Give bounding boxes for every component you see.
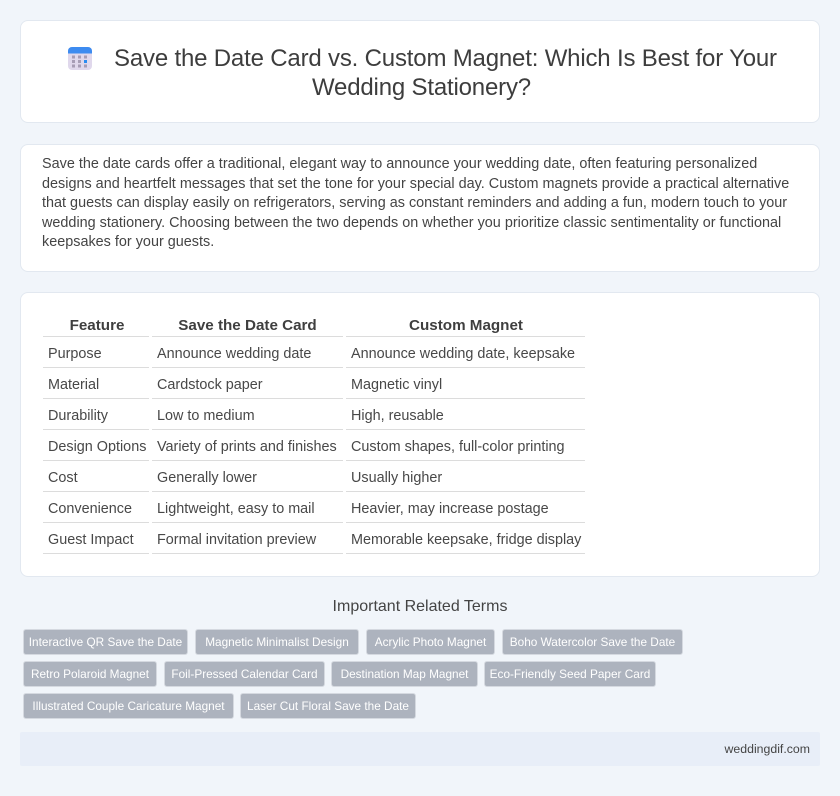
comparison table: Usually higher: [351, 470, 442, 486]
panel: header card: [20, 20, 820, 123]
comparison table: Announce wedding date: [157, 346, 311, 362]
comparison table: Magnetic vinyl: [351, 377, 442, 393]
related term tags: Illustrated Couple Caricature Magnet: [32, 699, 225, 713]
panel: comparison table card: [20, 292, 820, 577]
text block: summary paragraph: wedding stationery. Choosing between the two depends on whether you prioritize classic sentimentality or functional: [42, 214, 781, 230]
comparison table: Save the Date Card: [178, 317, 317, 334]
comparison table: Lightweight, easy to mail: [157, 501, 315, 517]
comparison table: Custom Magnet: [409, 317, 523, 334]
comparison table: Durability: [48, 408, 108, 424]
comparison table: Generally lower: [157, 470, 257, 486]
comparison table: Design Options: [48, 439, 146, 455]
comparison table: [43, 317, 585, 554]
comparison table: Heavier, may increase postage: [351, 501, 549, 517]
heading: related terms: Important Related Terms: [333, 598, 507, 615]
panel: summary card: [20, 144, 820, 272]
related term tags: Retro Polaroid Magnet: [31, 667, 149, 681]
icon: calendar: [68, 47, 92, 70]
footer source text: weddingdif.com: [725, 742, 810, 756]
text block: summary paragraph: designs and heartfelt messages that set the tone for your special day. Custom magnets provide a practical alternative: [42, 176, 789, 192]
related term tags: Acrylic Photo Magnet: [375, 635, 486, 649]
footer bar: [20, 732, 820, 766]
related term tags: Boho Watercolor Save the Date: [510, 635, 675, 649]
comparison table: Memorable keepsake, fridge display: [351, 532, 581, 548]
comparison table: Cost: [48, 470, 78, 486]
comparison table: Guest Impact: [48, 532, 134, 548]
comparison table: Cardstock paper: [157, 377, 263, 393]
related term tags: Eco-Friendly Seed Paper Card: [490, 667, 650, 681]
text block: summary paragraph: [42, 156, 789, 250]
related term tags: Foil-Pressed Calendar Card: [171, 667, 318, 681]
comparison table: Material: [48, 377, 99, 393]
comparison table: High, reusable: [351, 408, 444, 424]
comparison table: Convenience: [48, 501, 132, 517]
related term tags: [23, 629, 683, 719]
comparison table: Formal invitation preview: [157, 532, 316, 548]
title: Wedding Stationery?: [312, 74, 531, 101]
text block: summary paragraph: that guests can display easily on refrigerators, serving as constant reminders and adding a fun, modern touch to your: [42, 195, 787, 211]
comparison table: Purpose: [48, 346, 102, 362]
title: [114, 45, 777, 101]
related term tags: Destination Map Magnet: [341, 667, 468, 681]
text block: summary paragraph: keepsakes for your guests.: [42, 234, 214, 250]
title: Save the Date Card vs. Custom Magnet: Which Is Best for Your: [114, 45, 777, 72]
related term tags: Laser Cut Floral Save the Date: [247, 699, 409, 713]
comparison table: Custom shapes, full-color printing: [351, 439, 565, 455]
related term tags: Interactive QR Save the Date: [29, 635, 182, 649]
related term tags: Magnetic Minimalist Design: [205, 635, 349, 649]
comparison table: Low to medium: [157, 408, 255, 424]
text block: summary paragraph: Save the date cards offer a traditional, elegant way to announce your wedding date, often featuring personalized: [42, 156, 757, 172]
comparison table: Announce wedding date, keepsake: [351, 346, 575, 362]
comparison table: Feature: [70, 317, 124, 334]
comparison table: Variety of prints and finishes: [157, 439, 337, 455]
